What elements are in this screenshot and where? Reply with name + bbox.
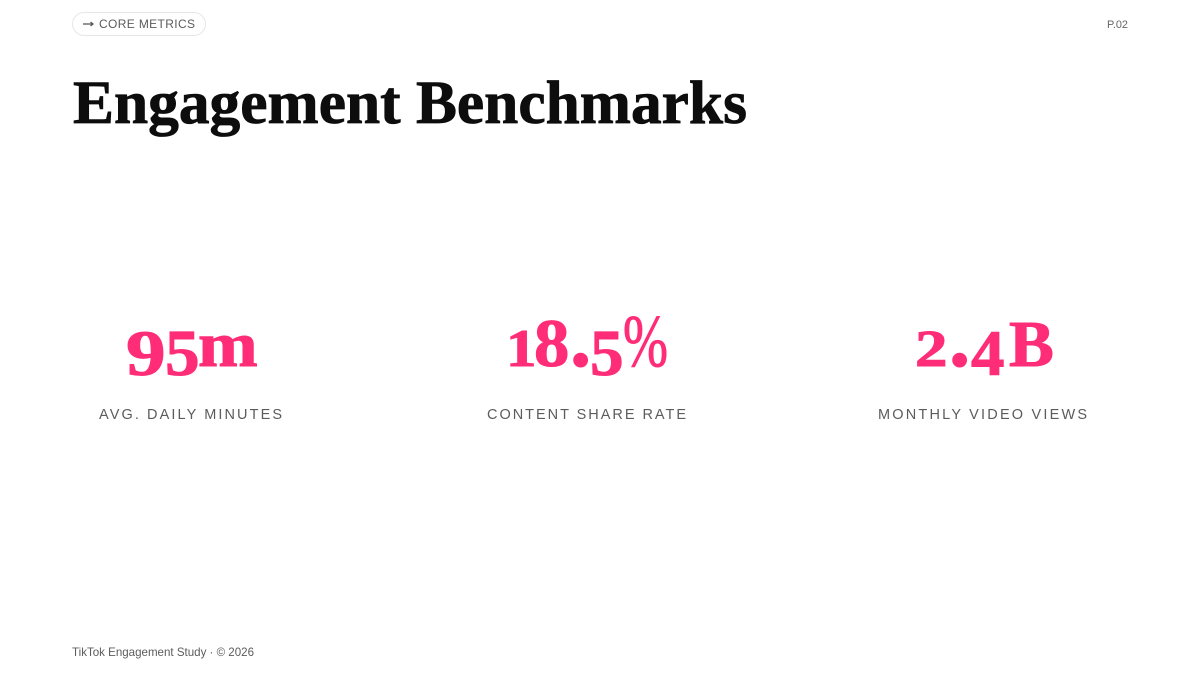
value: 2.4B: . bbox=[949, 291, 970, 385]
value: 18.5%: 1 bbox=[506, 320, 536, 378]
value: 2.4B: B bbox=[1009, 309, 1054, 381]
value: 95m bbox=[126, 309, 258, 390]
value: 18.5%: 5 bbox=[590, 318, 624, 390]
tag pill: core metrics bbox=[72, 12, 206, 36]
title: Engagement Benchmarks bbox=[73, 70, 747, 137]
page number: P.02 bbox=[1107, 19, 1128, 31]
metric: average daily minutes bbox=[99, 309, 282, 423]
value: 18.5%: % bbox=[623, 301, 668, 383]
value: 95m: m bbox=[198, 309, 258, 380]
metric: monthly video views bbox=[878, 291, 1087, 423]
label: MONTHLY VIDEO VIEWS bbox=[878, 407, 1087, 423]
value: 18.5% bbox=[506, 291, 668, 390]
value: 2.4B bbox=[915, 291, 1054, 390]
metric: content share rate bbox=[487, 291, 686, 423]
footer: TikTok Engagement Study · © 2026 bbox=[72, 645, 254, 659]
value: 18.5%: 8 bbox=[534, 306, 569, 382]
value: 95m: 5 bbox=[165, 316, 200, 390]
value: 2.4B: 4 bbox=[971, 318, 1004, 390]
value: 18.5%: . bbox=[570, 291, 591, 385]
tag pill: core metrics: CORE METRICS bbox=[99, 17, 195, 31]
value: 95m: 9 bbox=[126, 317, 166, 389]
label: AVG. DAILY MINUTES bbox=[99, 407, 282, 423]
icon: arrow bbox=[83, 22, 93, 26]
value: 2.4B: 2 bbox=[915, 320, 948, 377]
label: CONTENT SHARE RATE bbox=[487, 407, 686, 423]
